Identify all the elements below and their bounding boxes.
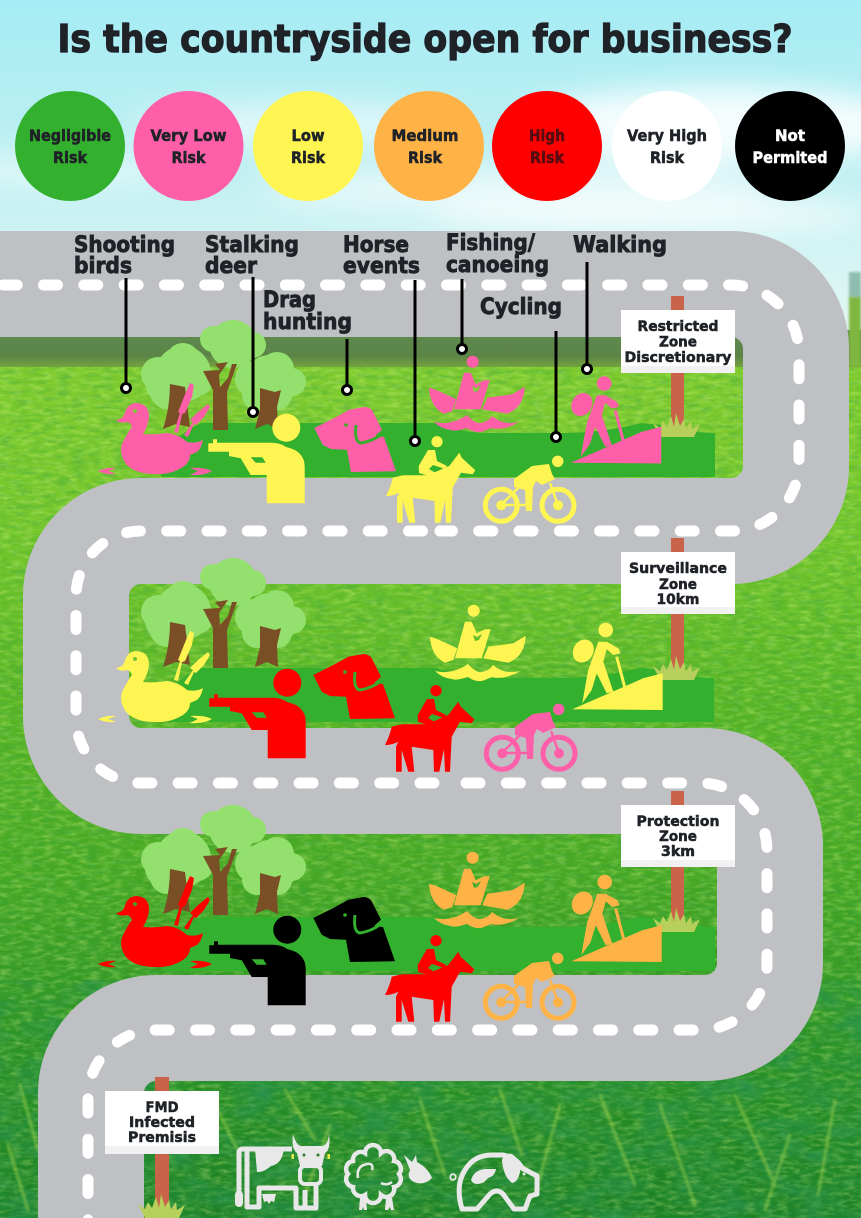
icon: trees (141, 805, 306, 915)
icon: trees (141, 320, 306, 430)
sign: surveillance zone: Surveillance (629, 561, 727, 577)
icon: sheep (346, 1145, 432, 1210)
label: walking: Walking (573, 233, 667, 258)
legend: very low risk (134, 91, 244, 201)
legend: high risk: Risk (530, 148, 564, 167)
icon: stalker with gun, not permitted (209, 916, 306, 1005)
legend: medium risk: Medium (392, 126, 458, 145)
panel: surveillance zone scene (98, 538, 735, 772)
label: fishing / canoeing: Fishing/ (446, 231, 536, 256)
sign post: infected premises (155, 1077, 169, 1209)
icon: grass tuft (138, 1194, 185, 1218)
icon: canoeist, medium risk (429, 852, 525, 928)
legend: medium risk: Risk (408, 148, 442, 167)
legend: low risk: Low (292, 126, 325, 145)
icon: duck, very low risk (98, 383, 212, 475)
sign post: surveillance zone (671, 538, 684, 672)
icon: grass tuft (653, 656, 700, 680)
legend: low risk (253, 91, 363, 201)
sign: surveillance zone: Zone (659, 577, 697, 593)
label: horse events (343, 233, 420, 279)
label: shooting birds: birds (74, 254, 132, 279)
leader: shooting birds (122, 278, 130, 392)
icon: horse and rider, high risk (385, 935, 474, 1022)
label: fishing / canoeing: canoeing (446, 253, 549, 278)
sign post: restricted zone (671, 296, 684, 430)
sign: restricted zone: Restricted (638, 319, 718, 335)
ground: protection zone (161, 917, 715, 971)
winding road (0, 284, 799, 1218)
icon: canoeist, very low risk (429, 356, 525, 432)
icon: grass tuft (653, 908, 700, 932)
legend: medium risk (374, 91, 484, 201)
activity labels (74, 231, 667, 335)
background: sky (0, 0, 861, 345)
sign: protection zone (621, 805, 735, 867)
legend: high risk (492, 91, 602, 201)
icon: trees (141, 558, 306, 668)
icon: dog, not permitted (313, 897, 395, 962)
icon: cow (235, 1134, 330, 1208)
legend: very high risk: Risk (650, 148, 684, 167)
label: stalking deer: Stalking (205, 233, 299, 258)
legend: negligible risk: Risk (53, 148, 87, 167)
legend: risk levels (15, 91, 845, 201)
sign: restricted zone (621, 310, 735, 373)
icon: cyclist, low risk (485, 456, 574, 521)
icon: horse and rider, high risk (385, 685, 474, 772)
sign: restricted zone: Zone (659, 334, 697, 350)
panel: protection zone scene (98, 791, 735, 1022)
background: clouds (0, 87, 861, 233)
label: drag hunting: hunting (263, 310, 352, 335)
legend: not permitted: Permited (752, 148, 828, 167)
legend: not permitted (735, 91, 845, 201)
sign: protection zone: 3km (661, 844, 695, 860)
legend: very high risk: Very High (627, 126, 707, 145)
legend: very low risk: Very Low (150, 126, 227, 145)
label: horse events: Horse (343, 233, 409, 258)
title: Is the countryside open for business? (58, 17, 792, 61)
sign: FMD infected premises: FMD (146, 1100, 178, 1116)
label: shooting birds (74, 233, 175, 279)
icon: duck, high risk (98, 876, 212, 968)
leader: cycling (552, 331, 560, 442)
label: drag hunting: Drag (263, 288, 316, 313)
sign: FMD infected premises: Premisis (128, 1130, 196, 1146)
icon: duck, low risk (98, 631, 212, 723)
legend: negligible risk (15, 91, 125, 201)
icon: canoeist, low risk (430, 605, 526, 681)
legend: very low risk: Risk (172, 148, 206, 167)
icon: cyclist, very low risk (486, 704, 575, 769)
legend: low risk: Risk (291, 148, 325, 167)
leader: stalking deer (248, 277, 258, 416)
icon: walker, low risk (569, 623, 663, 710)
icon: stalker with gun, high risk (209, 669, 306, 758)
icon: horse and rider, low risk (386, 436, 475, 523)
sign: surveillance zone (621, 552, 735, 614)
legend: negligible risk: Negligible (29, 126, 111, 145)
ground: surveillance zone (160, 668, 714, 722)
label: cycling: Cycling (480, 295, 562, 320)
ground: restricted zone (161, 423, 715, 477)
sign: surveillance zone: 10km (656, 592, 700, 608)
leader: walking (582, 262, 592, 374)
leader lines (122, 262, 592, 446)
legend: not permitted: Not (775, 126, 805, 145)
icon: dog, very low risk (314, 407, 396, 472)
sign: restricted zone: Discretionary (624, 350, 732, 366)
legend: very high risk (612, 91, 722, 201)
leader: drag hunting (342, 339, 352, 394)
icon: walker, very low risk (567, 376, 661, 464)
icon: stalker with gun, low risk (208, 414, 305, 503)
panel: infected premises (105, 1077, 537, 1218)
sign: protection zone: Zone (659, 829, 697, 845)
sign: FMD infected premises: Infected (129, 1115, 195, 1131)
label: shooting birds: Shooting (74, 233, 175, 258)
legend: high risk: High (529, 126, 565, 145)
panel: restricted zone scene (98, 296, 735, 523)
icon: grass tuft (653, 413, 700, 437)
icon: pig (450, 1154, 537, 1209)
icon: walker, medium risk (568, 875, 662, 962)
icon: dog, high risk (313, 654, 395, 719)
sign: FMD infected premises (105, 1091, 219, 1154)
label: horse events: events (343, 254, 420, 279)
label: drag hunting (263, 288, 352, 335)
label: stalking deer (205, 233, 299, 279)
label: stalking deer: deer (205, 254, 257, 279)
sign post: protection zone (671, 791, 684, 925)
leader: fishing (458, 279, 466, 354)
sign: protection zone: Protection (636, 814, 720, 830)
icon: cyclist, medium risk (485, 953, 574, 1018)
label: fishing / canoeing (446, 231, 549, 278)
leader: horse events (410, 280, 420, 446)
background: grass field (0, 272, 861, 1218)
